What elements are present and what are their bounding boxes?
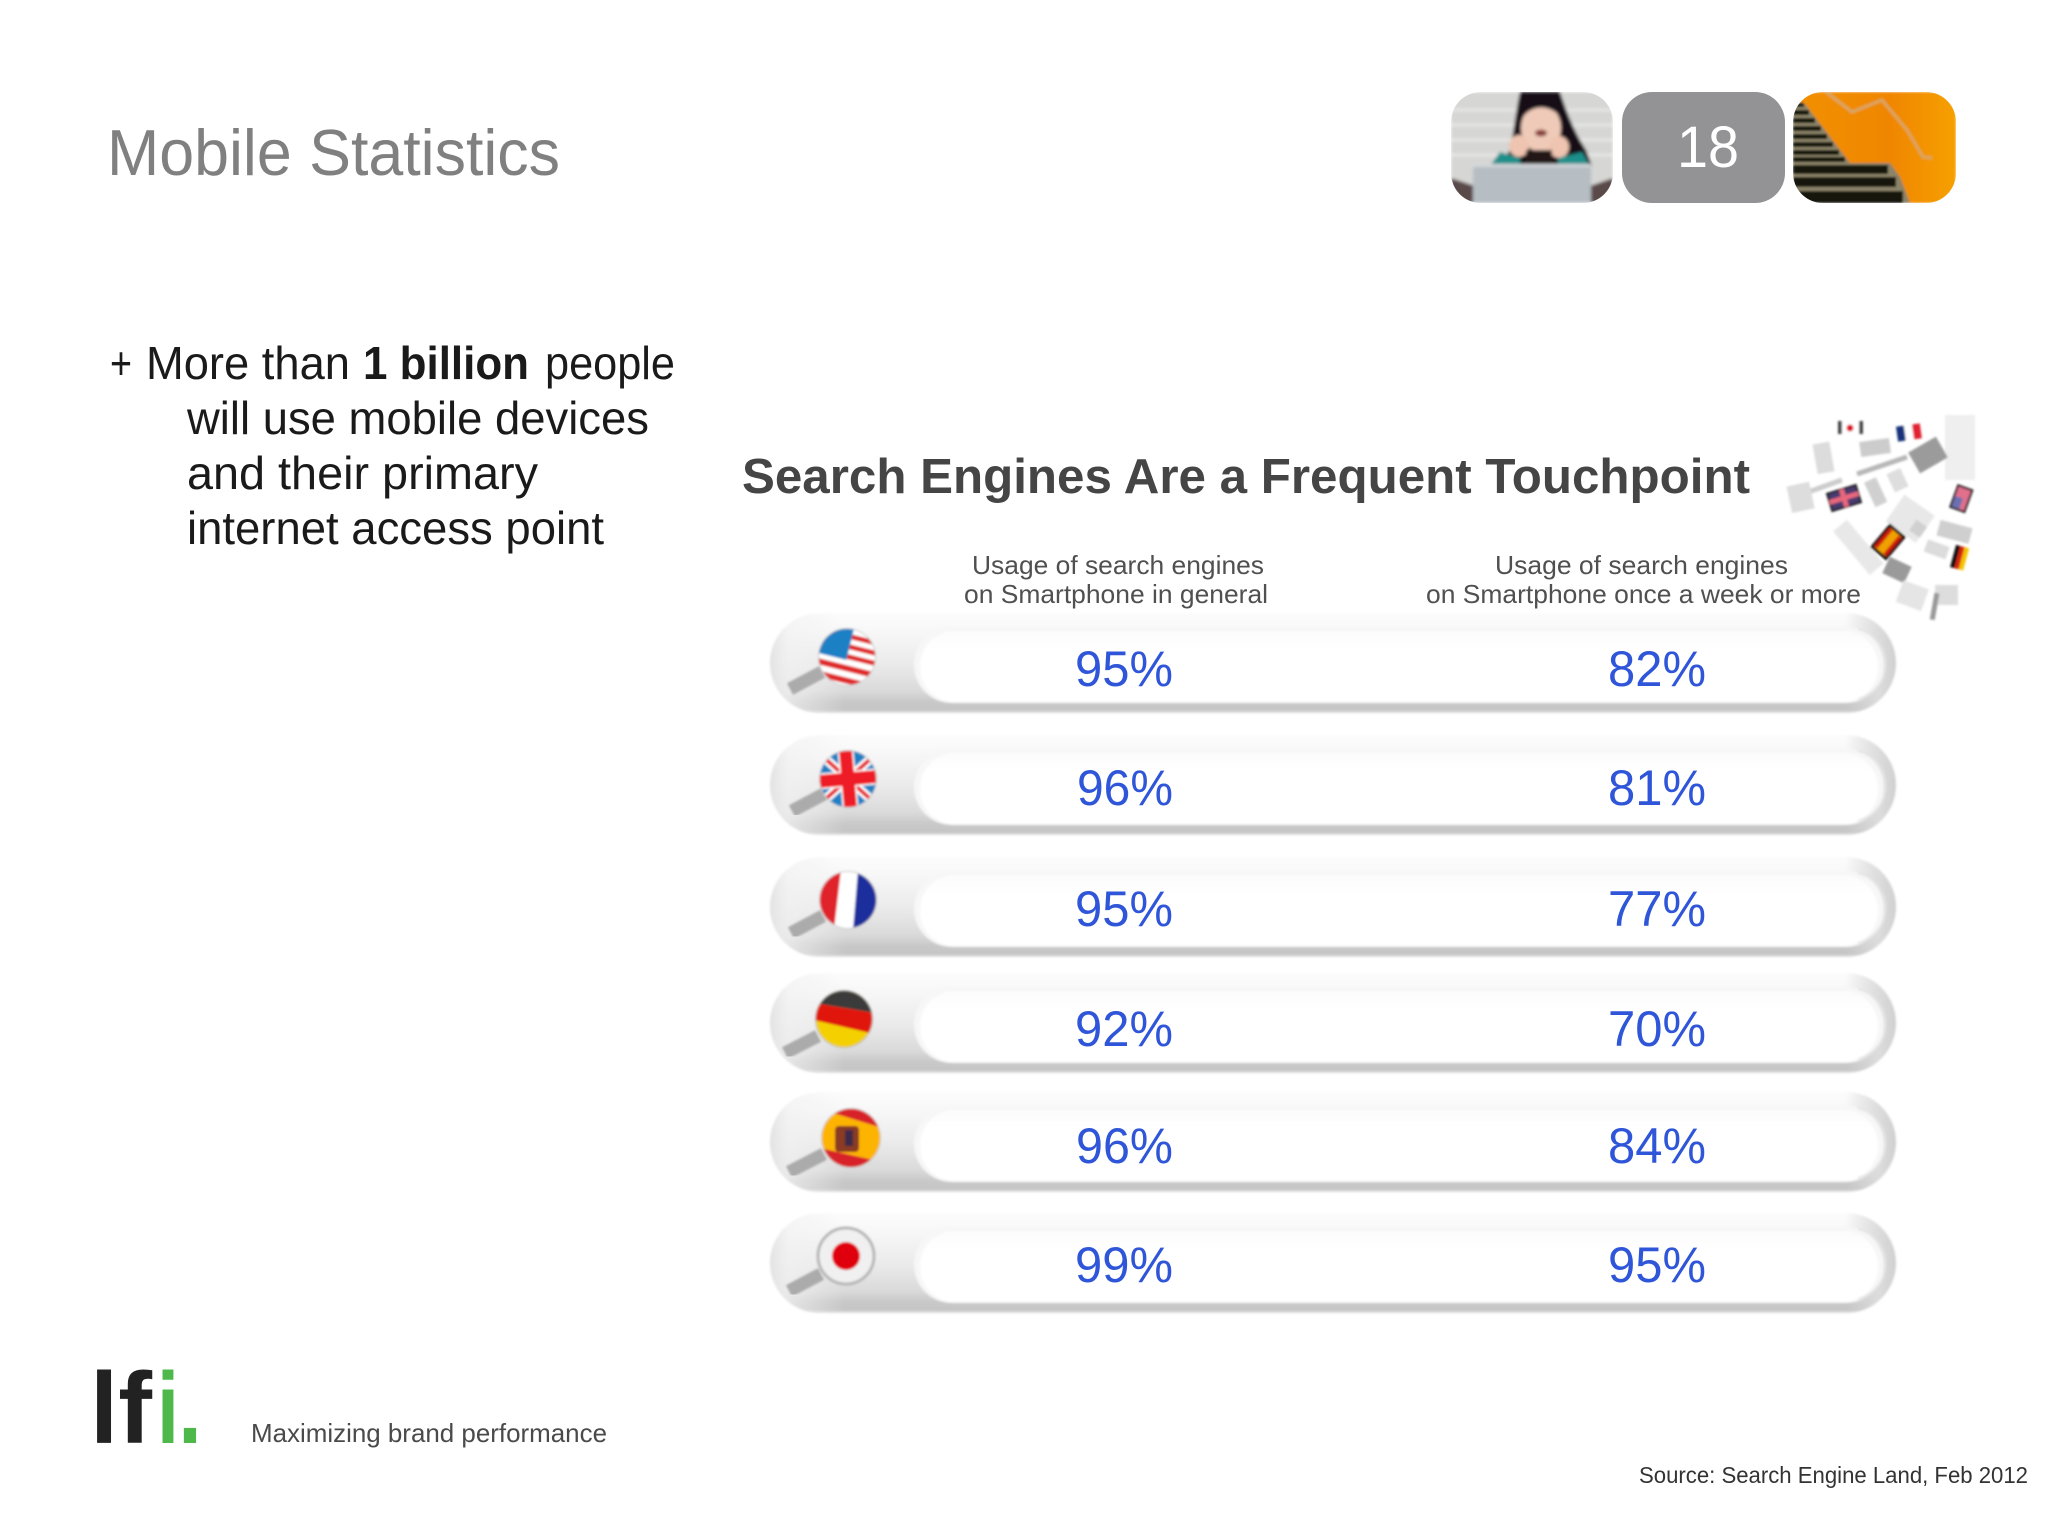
logo: lfi: lf [90, 1353, 152, 1465]
row: Germany: 92% [1075, 1001, 1173, 1057]
bullet text: 1 billion [363, 337, 529, 389]
slide number badge: 18 [1677, 115, 1739, 180]
bullet text: + [110, 337, 132, 389]
row: United States: 95% [1075, 641, 1173, 697]
row: United States [770, 613, 1896, 713]
row: United Kingdom: 81% [1608, 760, 1706, 816]
header: general usage: Usage of search engines [972, 550, 1264, 580]
logo: lfi: i [157, 1353, 179, 1465]
row: France: 95% [1075, 881, 1173, 937]
header: general usage [964, 550, 1268, 609]
mini flag: Spain [1872, 525, 1904, 559]
header: weekly usage: Usage of search engines [1495, 550, 1788, 580]
tagline: Maximizing brand performance [251, 1418, 607, 1448]
logo: lfi [90, 1353, 202, 1465]
decorative scattered flag devices [1787, 415, 1975, 620]
mini flag: France [1896, 423, 1922, 442]
row: France: 77% [1608, 881, 1706, 937]
mini flag: Japan [1838, 421, 1863, 434]
row: Spain [770, 1092, 1896, 1192]
row: United Kingdom [770, 735, 1896, 835]
mini flag: Germany [1950, 545, 1969, 571]
source note: Source: Search Engine Land, Feb 2012 [1639, 1462, 2028, 1488]
header image: woman with laptop [1451, 92, 1613, 203]
header: general usage: on Smartphone in general [964, 579, 1268, 609]
row: Spain: 84% [1608, 1118, 1706, 1174]
row: Spain: 96% [1076, 1118, 1173, 1174]
bullet text: and their primary [187, 447, 538, 499]
logo: lfi: . [178, 1353, 202, 1465]
header image: orange staircase [1793, 92, 1956, 203]
row: Germany: 70% [1608, 1001, 1706, 1057]
chart title: Search Engines Are a Frequent Touchpoint [742, 450, 1750, 504]
title: Mobile Statistics [107, 116, 560, 189]
row: Japan: 95% [1608, 1237, 1706, 1293]
header: weekly usage: on Smartphone once a week or more [1426, 579, 1861, 609]
row: Germany [770, 973, 1896, 1073]
row: France [770, 857, 1896, 957]
slide number badge [1622, 92, 1785, 203]
mini flag: USA [1950, 485, 1972, 512]
row: United States: 82% [1608, 641, 1706, 697]
mini flag: UK [1827, 485, 1861, 511]
row: Japan: 99% [1075, 1237, 1173, 1293]
row: United Kingdom: 96% [1077, 760, 1173, 816]
bullet text: internet access point [187, 502, 604, 554]
bullet text: More than [146, 337, 350, 389]
header: weekly usage [1426, 550, 1861, 609]
bullet text [110, 337, 675, 554]
bullet text: will use mobile devices [186, 392, 649, 444]
bullet text: people [545, 337, 675, 389]
row: Japan [770, 1213, 1896, 1313]
column headers [964, 550, 1861, 609]
